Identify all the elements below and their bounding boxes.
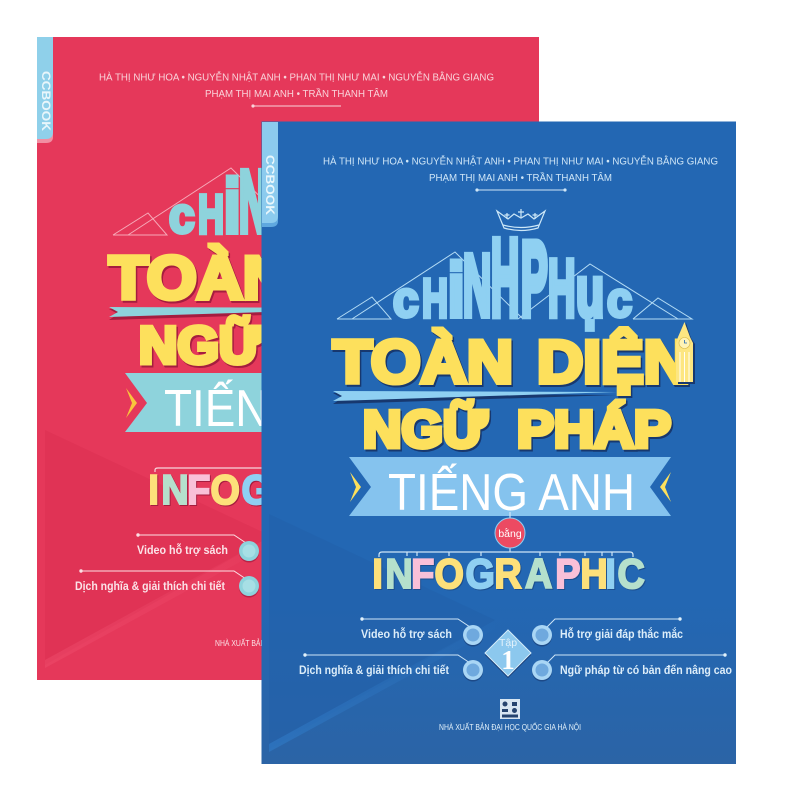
authors: red book: PHẠM THỊ MAI ANH • TRẦN THANH TÂM	[205, 87, 388, 100]
infographic word: C	[617, 551, 645, 597]
infographic word: red book: O	[211, 467, 240, 513]
title: toan dien: TOÀN	[333, 328, 513, 396]
title word: chinh, red book: H	[198, 183, 224, 245]
infographic word: R	[494, 551, 522, 597]
infographic word: G	[465, 551, 495, 597]
title word: chinh phuc: c	[607, 272, 632, 327]
title: ngu phap: PHÁP	[518, 403, 672, 461]
spine tab: red book: CCBOOK	[39, 71, 51, 132]
title word: chinh phuc: H	[548, 244, 575, 334]
infographic word: P	[556, 552, 582, 598]
infographic word: red book	[148, 467, 272, 514]
authors: blue book: HÀ THỊ NHƯ HOA • NGUYỄN NHẬT ANH • PHAN THỊ NHƯ MAI • NGUYỄN BẰNG GIANG	[323, 154, 718, 168]
infographic word: G	[466, 552, 496, 598]
infographic connector: red book	[155, 468, 276, 472]
title: toan dien: DIỆN	[537, 328, 690, 396]
infographic word: F	[412, 552, 435, 598]
feature: translation	[299, 653, 483, 682]
title: toan dien: DIỆN	[538, 330, 692, 398]
infographic word: O	[436, 552, 465, 598]
infographic word: H	[581, 552, 609, 598]
title word: chinh, red book: i	[224, 165, 240, 249]
authors: blue book: PHẠM THỊ MAI ANH • TRẦN THANH TÂM	[429, 171, 612, 184]
spine tab: blue book	[262, 122, 278, 227]
infographic word	[372, 551, 646, 598]
feature: video support, red book: Video hỗ trợ sách	[137, 542, 228, 557]
feature: grammar levels: Ngữ pháp từ có bản đến nâng cao	[560, 663, 732, 677]
banner: tieng anh: TIẾNG ANH	[388, 463, 635, 522]
feature: video support	[360, 617, 483, 646]
icon: crown	[497, 209, 545, 230]
publisher name: NHÀ XUẤT BẢN ĐẠI HỌC QUỐC GIA HÀ NỘI	[439, 721, 581, 732]
feature: grammar levels	[532, 653, 732, 682]
infographic word: red book: F	[188, 468, 211, 514]
title word: chinh phuc: H	[422, 267, 448, 329]
feature: video support: Video hỗ trợ sách	[361, 626, 452, 641]
infographic word: red book: N	[161, 467, 189, 513]
infographic word: red book: G	[242, 468, 272, 514]
title word: chinh phuc: H	[491, 218, 519, 339]
infographic word: red book: F	[187, 467, 210, 513]
badge: bang	[495, 512, 525, 552]
spine tab: red book	[37, 37, 53, 143]
title word: chinh phuc: N	[463, 238, 491, 335]
infographic connector	[379, 552, 633, 557]
title word: chinh, red book: N	[239, 154, 267, 251]
title word: chinh phuc	[393, 218, 632, 339]
infographic word: red book: G	[241, 467, 271, 513]
badge: bang: bằng	[498, 527, 522, 540]
title word: chinh phuc: c	[393, 273, 419, 328]
infographic word: P	[555, 551, 581, 597]
title: ngu phap: NGỮ	[364, 402, 489, 461]
ribbon: red book	[109, 307, 393, 320]
infographic word: red book: I	[149, 468, 160, 514]
feature: translation, red book: Dịch nghĩa & giải thích chi tiết	[75, 579, 225, 593]
publisher: red book: NHÀ XUẤT BẢN ĐẠI HỌC QUỐC GIA HÀ NỘI	[215, 637, 357, 648]
infographic word: red book: I	[148, 467, 159, 513]
infographic word: I	[606, 552, 617, 598]
infographic word: N	[386, 552, 414, 598]
infographic word: H	[580, 551, 608, 597]
title word: chinh, red book: c	[169, 189, 195, 244]
infographic word: I	[372, 551, 383, 597]
infographic word: red book: N	[162, 468, 190, 514]
spine tab: blue book: CCBOOK	[263, 155, 275, 216]
infographic word: F	[411, 551, 434, 597]
feature: question support: Hỗ trợ giải đáp thắc mắc	[560, 626, 683, 641]
infographic word: A	[525, 551, 552, 597]
title: toan, red book: TOÀN	[109, 244, 289, 312]
title: ngu, red book: NGỮ	[139, 316, 264, 375]
feature: translation, red book	[75, 569, 259, 598]
badge: volume 1	[485, 630, 531, 678]
mountain lines: blue book	[337, 252, 692, 319]
banner: red book: TIẾNG ANH	[164, 379, 411, 438]
infographic word: R	[495, 552, 523, 598]
title word: chinh, red book	[169, 154, 267, 251]
title: ngu phap: NGỮ	[363, 400, 488, 459]
title: ngu phap: PHÁP	[517, 401, 671, 459]
title: ngu phap	[363, 400, 672, 461]
icon: big ben tower	[676, 322, 695, 384]
feature: question support	[532, 617, 683, 646]
ribbon under title	[333, 386, 629, 404]
mountain lines: red book	[113, 168, 299, 235]
infographic word: C	[618, 552, 646, 598]
title word: chinh phuc: P	[521, 220, 548, 337]
icon: publisher logo	[500, 699, 520, 719]
authors: red book: HÀ THỊ NHƯ HOA • NGUYỄN NHẬT ANH • PHAN THỊ NHƯ MAI • NGUYỄN BẰNG GIANG	[99, 70, 494, 84]
title word: chinh phuc: i	[448, 249, 464, 333]
infographic word: N	[385, 551, 413, 597]
infographic word: A	[526, 552, 553, 598]
panel: blue book cover	[262, 122, 736, 764]
feature: translation: Dịch nghĩa & giải thích chi tiết	[299, 663, 449, 677]
title: toan dien	[333, 328, 692, 398]
authors: red book	[99, 70, 494, 108]
badge: volume 1: Tập	[499, 637, 517, 649]
title: toan dien: TOÀN	[334, 330, 514, 398]
infographic word: O	[435, 551, 464, 597]
panel: red book cover	[37, 37, 539, 680]
title: toan, red book: TOÀN	[110, 246, 290, 314]
title word: chinh phuc: ụ	[576, 252, 604, 331]
title: ngu, red book: NGỮ	[140, 318, 265, 377]
infographic word: red book: O	[212, 468, 241, 514]
infographic word: I	[373, 552, 384, 598]
infographic word: I	[605, 551, 616, 597]
authors: blue book	[323, 154, 718, 192]
feature: video support, red book	[136, 533, 259, 562]
badge: volume 1: 1	[501, 645, 515, 675]
